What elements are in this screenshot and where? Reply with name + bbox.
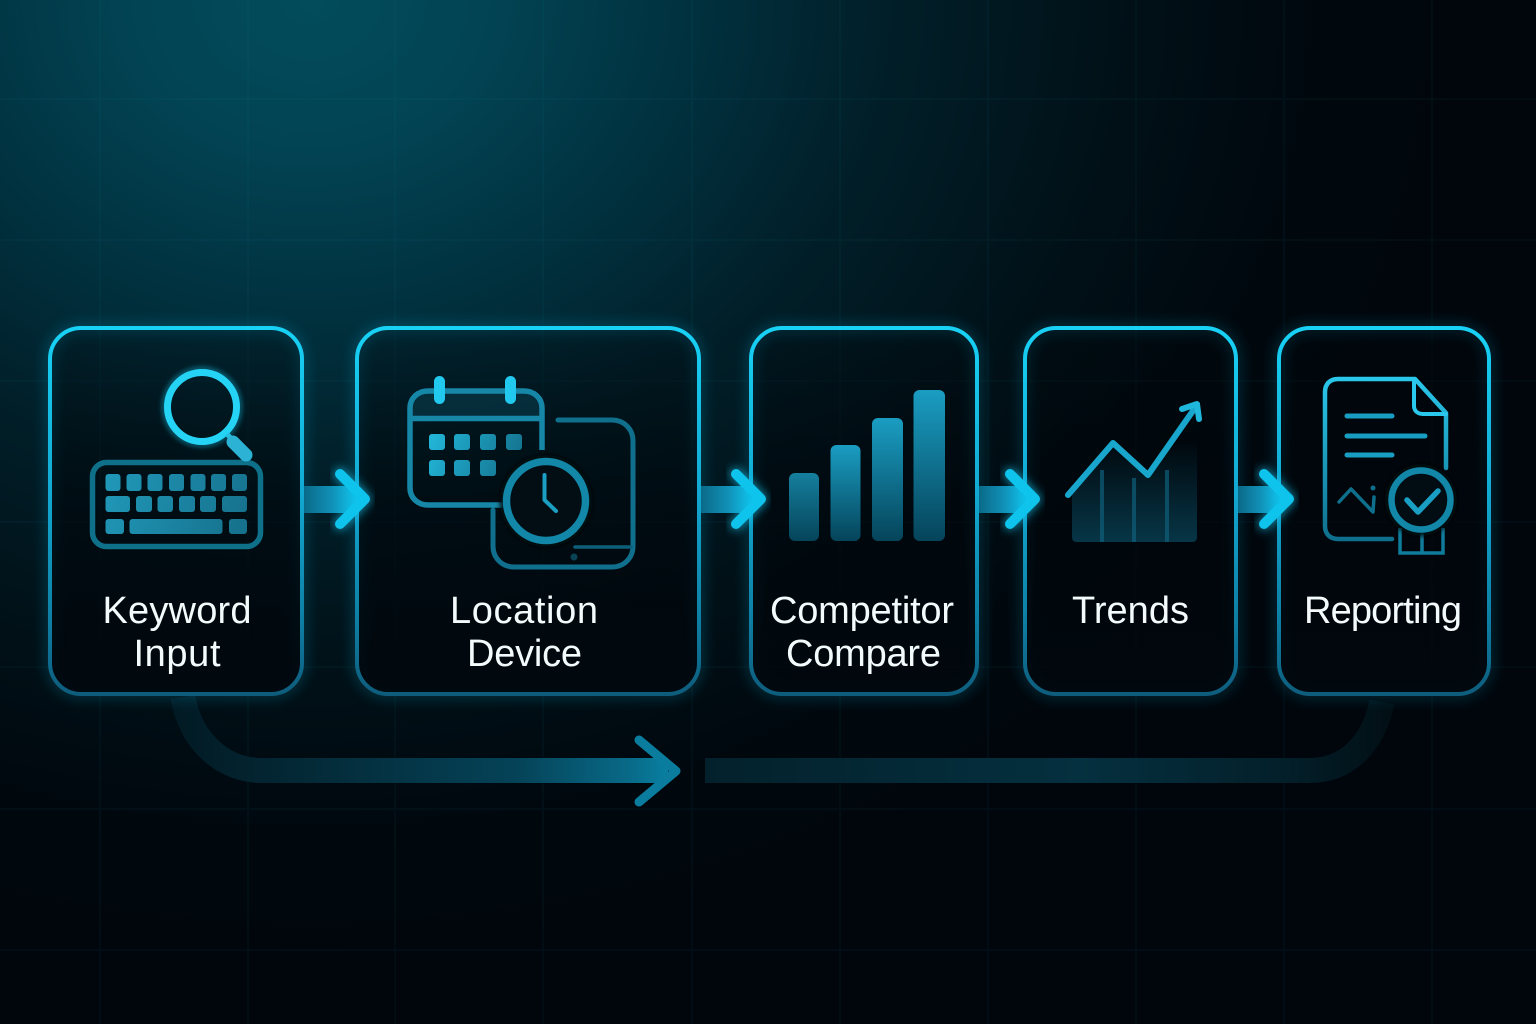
label: Competitor Compare: Competitor <box>770 590 954 632</box>
panel: Keyword Input <box>50 328 302 694</box>
magnifier <box>164 369 246 455</box>
seal with check <box>1385 464 1457 553</box>
panel: Location Device <box>357 328 699 694</box>
label: Reporting: Reporting <box>1304 590 1462 632</box>
label: Location Device: Location <box>450 590 598 632</box>
tablet <box>493 420 633 567</box>
arrow: Trends to Reporting <box>1238 474 1289 524</box>
document <box>1325 379 1446 539</box>
label: Competitor Compare: Compare <box>786 633 941 675</box>
label: Trends: Trends <box>1072 590 1189 632</box>
label: Keyword Input: Keyword <box>102 590 252 632</box>
label: Keyword Input: Input <box>134 633 221 675</box>
lower loop: return band right <box>705 702 1382 770</box>
panel: Reporting <box>1279 328 1489 694</box>
clock <box>500 455 592 547</box>
arrow: Competitor Compare to Trends <box>979 474 1035 524</box>
icon: report document with seal <box>1325 379 1457 553</box>
arrow: Keyword Input to Location Device <box>304 474 365 524</box>
keyboard <box>92 462 260 546</box>
panel: Competitor Compare <box>751 328 977 694</box>
icon: trend line with area <box>1068 404 1199 542</box>
label: Keyword Input <box>102 590 252 675</box>
arrow: Location Device to Competitor Compare <box>701 474 761 524</box>
label: Location Device <box>450 590 598 675</box>
panel: Trends <box>1025 328 1236 694</box>
calendar <box>410 376 542 505</box>
lower loop arrow <box>183 697 1382 802</box>
lower loop: arrowhead <box>639 740 676 802</box>
icon: bar chart <box>789 390 945 541</box>
icon: calendar, tablet and clock <box>410 376 633 567</box>
label: Location Device: Device <box>467 633 582 675</box>
label: Competitor Compare <box>770 590 954 675</box>
lower loop: band into arrowhead <box>183 697 668 770</box>
icon: magnifier over keyboard <box>92 369 260 546</box>
